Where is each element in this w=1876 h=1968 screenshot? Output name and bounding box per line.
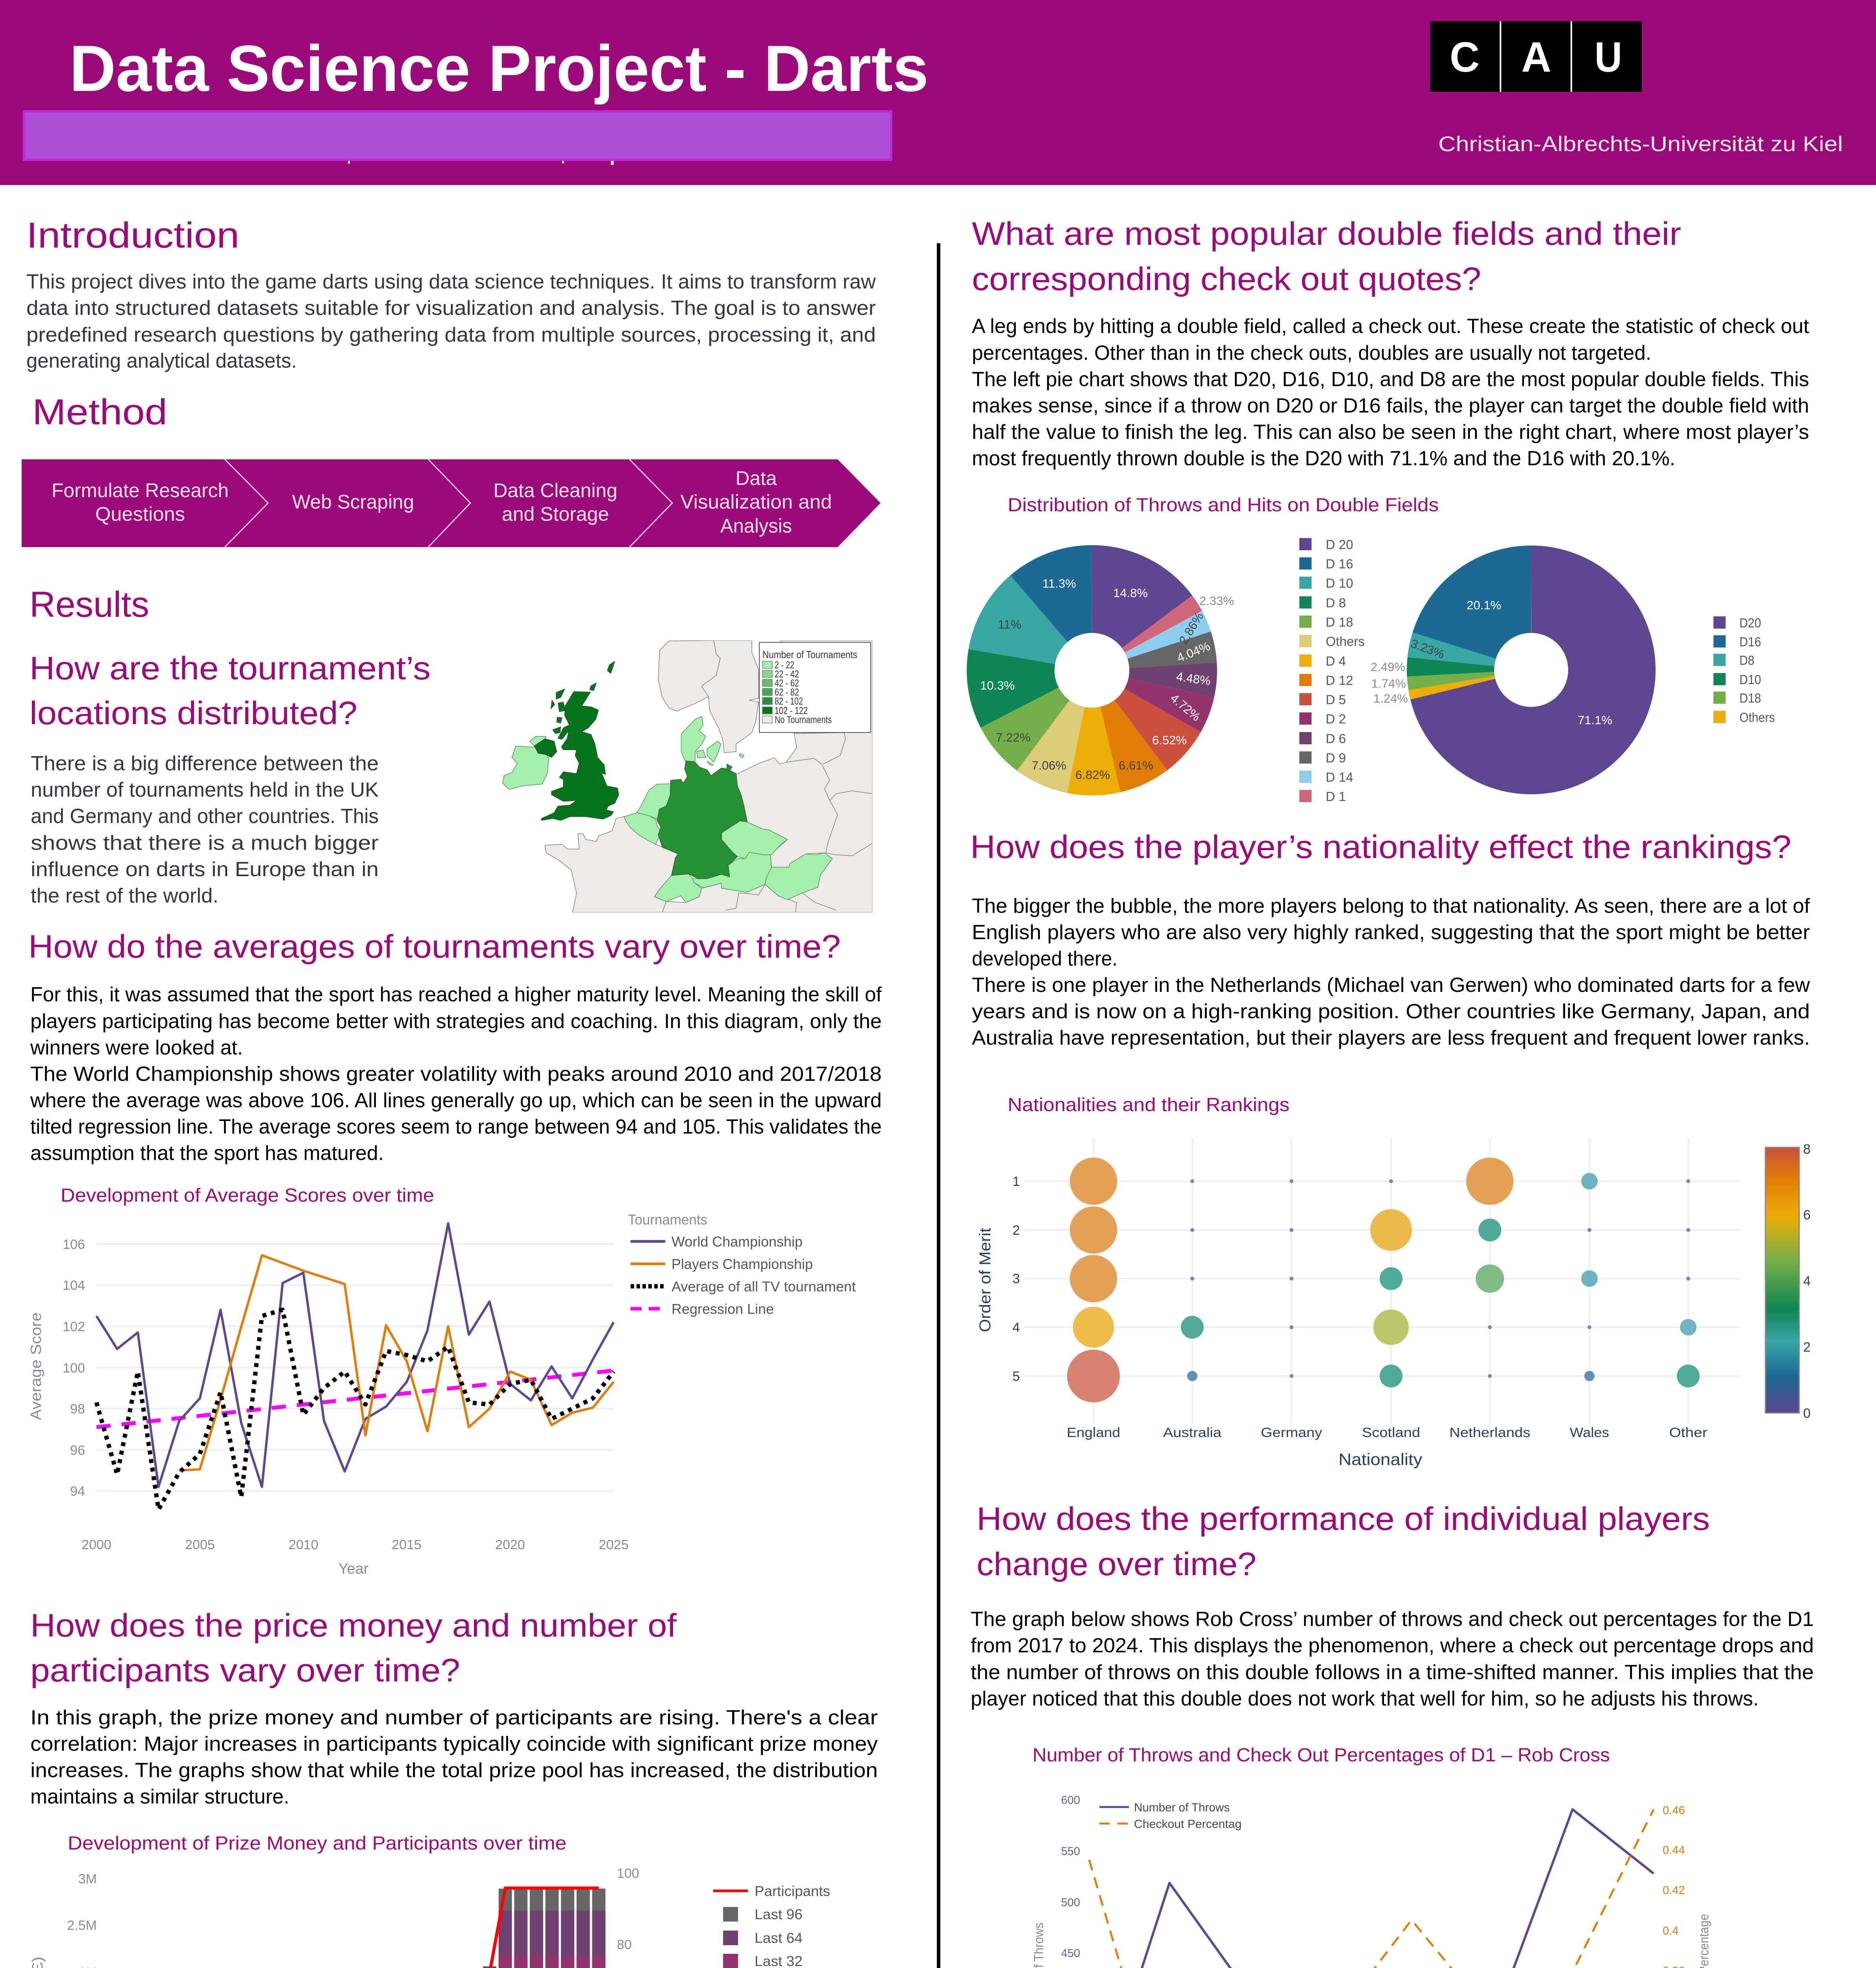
series: number of throws [1089, 1809, 1654, 1968]
line chart: average scores [28, 1212, 856, 1577]
legend: prize categories: Last 96 [755, 1906, 803, 1922]
icon: CAU logo: A [1521, 33, 1551, 81]
choropleth map of tournaments [503, 640, 872, 912]
step 1: Questions [95, 503, 185, 525]
line chart: average scores: 2015 [392, 1537, 422, 1552]
donut chart: throws on doubles: 2.86% [1176, 610, 1206, 647]
heading: tournament locations [30, 650, 431, 731]
line chart: average scores: 104 [63, 1278, 85, 1293]
donut chart: throws on doubles: 6.61% [1119, 758, 1153, 772]
text block: double fields: half the value to finish the leg. This can also be seen in the right chart, where most player’s [972, 421, 1809, 444]
line chart: average scores: 2025 [599, 1537, 629, 1552]
bubble chart: nationalities and rankings: Order of Merit [977, 1228, 994, 1332]
step 4 [680, 467, 832, 537]
text block: player performance [971, 1608, 1814, 1710]
text block: locations: the rest of the world. [31, 884, 218, 907]
map legend: 42 - 62 [775, 678, 799, 689]
legend: tournaments: Tournaments [628, 1212, 707, 1228]
color scale bar [1765, 1142, 1811, 1421]
legend: most thrown double: D18 [1739, 691, 1761, 705]
text block: locations: number of tournaments held in the UK [31, 779, 379, 801]
stacked bar chart: prize money and participants: 2.5M [67, 1918, 97, 1933]
heading: prize money: participants vary over time? [30, 1652, 460, 1689]
title: Data Science Project - Darts [69, 32, 929, 105]
line chart: rob cross: 0.44 [1663, 1844, 1685, 1857]
map legend: No Tournaments [775, 714, 832, 725]
series: world championship [96, 1223, 614, 1487]
stacked bar chart: prize money and participants: 3M [78, 1872, 97, 1887]
text block: double fields [972, 315, 1809, 470]
color scale bar: 2 [1803, 1340, 1811, 1355]
text block: player performance: from 2017 to 2024. This displays the phenomenon, where a check out percentage drops and [971, 1634, 1814, 1657]
text block: player performance: the number of throws on this double follows in a time-shifted manner. This implies that the [971, 1661, 1814, 1684]
text block: averages: winners were looked at. [30, 1036, 243, 1059]
icon: CAU logo [1430, 21, 1642, 92]
map legend: 82 - 102 [775, 696, 803, 707]
heading: double fields [972, 215, 1681, 297]
text block: nationality: There is one player in the Netherlands (Michael van Gerwen) who dominated darts for a few [972, 974, 1810, 997]
text block: double fields: makes sense, since if a throw on D20 or D16 fails, the player can target the double field with [972, 394, 1809, 417]
legend: most thrown double: D8 [1739, 653, 1754, 668]
header banner [0, 0, 1876, 185]
map legend: 22 - 42 [775, 669, 799, 680]
line chart: rob cross: 0.42 [1663, 1884, 1685, 1897]
legend: tournaments: Players Championship [672, 1256, 813, 1272]
line chart: average scores: 100 [63, 1361, 85, 1376]
text block: introduction: predefined research questions by gathering data from multiple sources, processing it, and [26, 324, 876, 346]
stacked bar chart: prize money and participants: 80 [617, 1937, 632, 1952]
text block: introduction: generating analytical datasets. [26, 350, 297, 372]
text block: player performance: player noticed that this double does not work that well for him, so he adjusts his throws. [971, 1687, 1759, 1710]
legend: throws on doubles: D 20 [1326, 537, 1353, 552]
legend: tournaments: Regression Line [672, 1301, 774, 1317]
legend: throws on doubles: Others [1326, 634, 1365, 649]
series: players championship [179, 1255, 614, 1470]
text block: introduction: This project dives into the game darts using data science techniques. It aims to transform raw [26, 270, 876, 293]
legend: tournaments [628, 1212, 856, 1317]
text block: introduction: data into structured datasets suitable for visualization and analysis. The goal is to answer [26, 297, 876, 320]
legend: most thrown double: D16 [1739, 634, 1761, 649]
donut chart: throws on doubles: 11.3% [1042, 577, 1076, 590]
line chart: average scores: 2010 [289, 1537, 318, 1552]
color scale bar: 8 [1803, 1142, 1811, 1157]
donut chart: most thrown double [1371, 589, 1612, 751]
color scale bar: 6 [1803, 1208, 1811, 1223]
legend: throws on doubles: D 9 [1326, 751, 1346, 765]
donut chart: throws on doubles: 10.3% [980, 679, 1015, 692]
legend: rob cross [1099, 1803, 1241, 1830]
step 3: and Storage [502, 503, 609, 525]
text block: locations: influence on darts in Europe than in [31, 858, 379, 881]
map legend [759, 642, 871, 732]
step 4: Analysis [720, 515, 792, 537]
redaction box over subtitle [24, 111, 891, 165]
bubble chart: nationalities and rankings: 2 [1012, 1223, 1020, 1238]
donut chart: throws on doubles [980, 577, 1234, 782]
text block: averages [30, 983, 882, 1165]
step 4: Visualization and [680, 491, 832, 513]
text block: prize money: In this graph, the prize money and number of participants are rising. There's a clear [30, 1706, 878, 1729]
text block: nationality: developed there. [972, 947, 1117, 970]
legend: prize categories [713, 1883, 856, 1968]
text block: averages: players participating has become better with strategies and coaching. In this diagram, only the [30, 1010, 882, 1033]
heading: nationality: How does the player’s nationality effect the rankings? [970, 829, 1791, 865]
text block: double fields: A leg ends by hitting a double field, called a check out. These create the statistic of check out [972, 315, 1809, 338]
donut chart: most thrown double: 2.49% [1371, 660, 1405, 674]
chart title: double fields: Distribution of Throws and Hits on Double Fields [1008, 495, 1439, 516]
donut chart: most thrown double: 3.23% [1409, 636, 1446, 661]
text block: double fields: most frequently thrown double is the D20 with 71.1% and the D16 with 20.1%. [972, 447, 1675, 470]
legend: prize categories: Participants [755, 1883, 830, 1899]
line chart: average scores: 2000 [81, 1537, 111, 1552]
heading: double fields: corresponding check out quotes? [972, 261, 1481, 297]
text block: double fields: The left pie chart shows that D20, D16, D10, and D8 are the most popular double fields. This [972, 368, 1809, 391]
line chart: rob cross: 500 [1061, 1896, 1080, 1909]
line chart: rob cross [1031, 1794, 1711, 1968]
legend: most thrown double: D10 [1739, 672, 1761, 687]
donut chart: throws on doubles: 4.48% [1175, 670, 1212, 688]
line chart: rob cross: 0.46 [1663, 1804, 1685, 1817]
color scale bar: 4 [1803, 1274, 1811, 1289]
donut chart: throws on doubles: 11% [998, 618, 1021, 631]
color scale bar: 0 [1803, 1406, 1811, 1421]
donut chart: throws on doubles: 4.04% [1175, 639, 1212, 665]
map legend: 102 - 122 [775, 705, 808, 716]
chart title: nationalities: Nationalities and their Rankings [1008, 1095, 1290, 1115]
bubble chart: nationalities and rankings: Netherlands [1449, 1425, 1530, 1440]
legend: throws on doubles: D 2 [1326, 712, 1346, 726]
text block: nationality: English players who are also very highly ranked, suggesting that the sport might be better [972, 921, 1810, 944]
legend: most thrown double: Others [1739, 710, 1775, 725]
line chart: rob cross: 450 [1061, 1947, 1080, 1960]
chart title: prize money: Development of Prize Money and Participants over time [68, 1833, 566, 1854]
heading: player performance: How does the performance of individual players [977, 1500, 1710, 1537]
legend: throws on doubles: D 8 [1326, 596, 1346, 610]
line chart: average scores: 96 [70, 1443, 85, 1458]
heading: averages: How do the averages of tournaments vary over time? [28, 928, 841, 965]
step 2: Web Scraping [292, 491, 414, 513]
heading: tournament locations: locations distributed? [30, 695, 357, 731]
step 3: Data Cleaning [494, 479, 617, 501]
legend: throws on doubles: D 6 [1326, 731, 1346, 746]
donut chart: throws on doubles: 6.52% [1152, 733, 1187, 747]
legend: throws on doubles: D 5 [1326, 692, 1346, 707]
heading: player performance [977, 1500, 1710, 1582]
legend: throws on doubles: D 14 [1326, 770, 1353, 784]
heading: double fields: What are most popular double fields and their [972, 215, 1681, 252]
text block: nationality: years and is now on a high-ranking position. Other countries like Germany, Japan, and [972, 1000, 1810, 1023]
text block: double fields: percentages. Other than in the check outs, doubles are usually not targeted. [972, 342, 1651, 364]
series: regression line [96, 1371, 614, 1427]
bubble chart: nationalities and rankings: Other [1669, 1425, 1708, 1440]
text block: locations: and Germany and other countries. This [31, 805, 379, 828]
stacked bar chart: prize money and participants: 100 [617, 1866, 639, 1881]
bubble chart: nationalities and rankings: Wales [1570, 1425, 1609, 1440]
donut chart: throws on doubles: 14.8% [1113, 586, 1148, 600]
step 3 [494, 479, 617, 525]
heading: prize money: How does the price money and number of [30, 1607, 677, 1644]
text block: averages: tilted regression line. The average scores seem to range between 94 and 105. This validates the [30, 1115, 882, 1138]
donut chart: most thrown double: 1.24% [1373, 692, 1408, 705]
legend: throws on doubles: D 4 [1326, 654, 1346, 668]
heading: prize money [30, 1607, 677, 1689]
heading: method: Method [32, 392, 167, 432]
line chart: average scores: 106 [63, 1237, 85, 1252]
legend: tournaments: Average of all TV tournament [672, 1278, 856, 1295]
legend: prize categories: Last 64 [755, 1930, 803, 1946]
line chart: average scores: 2005 [185, 1537, 215, 1552]
donut chart: most thrown double: 1.74% [1371, 677, 1406, 690]
heading: tournament locations: How are the tournament’s [30, 650, 431, 686]
line chart: average scores: 2020 [495, 1537, 525, 1552]
legend: most thrown double [1713, 616, 1775, 725]
university name: Christian-Albrechts-Universität zu Kiel [1438, 132, 1843, 156]
heading: introduction: Introduction [26, 215, 239, 255]
donut chart: throws on doubles: 4.72% [1168, 691, 1203, 724]
bubble chart: nationalities and rankings: 1 [1012, 1174, 1020, 1189]
text block: nationality: The bigger the bubble, the more players belong to that nationality. As seen, there are a lot of [972, 895, 1810, 917]
legend: throws on doubles: D 16 [1326, 557, 1353, 571]
text block: prize money: correlation: Major increases in participants typically coincide with significant prize money [30, 1733, 878, 1755]
process chevrons [22, 459, 881, 547]
bubble chart: nationalities and rankings: Nationality [1338, 1450, 1423, 1469]
line chart: rob cross: 600 [1061, 1794, 1080, 1807]
series: participants line [115, 1888, 599, 1968]
line chart: average scores: 102 [63, 1319, 85, 1334]
icon: CAU logo: C [1450, 33, 1480, 81]
legend: tournaments: World Championship [672, 1234, 803, 1250]
step 1: Formulate Research [52, 479, 229, 501]
donut chart: throws on doubles: 7.06% [1032, 758, 1066, 772]
line chart: average scores: 98 [70, 1402, 85, 1417]
line chart: average scores: Year [339, 1561, 369, 1577]
bubble chart: nationalities and rankings [977, 1138, 1811, 1469]
step 4: Data [735, 467, 777, 489]
line chart: rob cross: 550 [1061, 1845, 1080, 1858]
heading: results: Results [30, 584, 149, 625]
bubble chart: nationalities and rankings: 5 [1012, 1369, 1020, 1384]
map legend: 62 - 82 [775, 687, 799, 698]
donut chart: throws on doubles: 6.82% [1075, 768, 1110, 782]
heading: player performance: change over time? [977, 1546, 1256, 1582]
bubble chart: nationalities and rankings: Australia [1163, 1425, 1221, 1440]
bubble chart: nationalities and rankings: 3 [1012, 1271, 1020, 1286]
map legend: Number of Tournaments [762, 649, 857, 660]
icon: CAU logo: U [1595, 33, 1622, 81]
series: checkout percentage [1089, 1809, 1654, 1968]
legend: throws on doubles: D 10 [1326, 576, 1353, 590]
text block: nationality: Australia have representation, but their players are less frequent and frequent lower ranks. [972, 1027, 1810, 1049]
series: average of all tv tournaments [96, 1310, 614, 1509]
bubble chart: nationalities and rankings: Scotland [1362, 1425, 1420, 1440]
text block: averages: where the average was above 106. All lines generally go up, which can be seen in the upward [30, 1089, 882, 1112]
text block: introduction [26, 270, 876, 372]
chart title: rob cross: Number of Throws and Check Out Percentages of D1 – Rob Cross [1032, 1745, 1610, 1766]
legend: rob cross: Number of Throws [1134, 1801, 1230, 1814]
legend: throws on doubles [1299, 537, 1365, 804]
donut chart: most thrown double: 20.1% [1467, 598, 1501, 612]
text block: prize money [30, 1706, 878, 1808]
legend: rob cross: Checkout Percentage [1134, 1818, 1248, 1831]
map legend: 2 - 22 [775, 660, 794, 671]
text block: averages: assumption that the sport has matured. [30, 1142, 384, 1165]
line chart: rob cross: 0.4 [1663, 1925, 1678, 1937]
bubble chart: nationalities and rankings: Germany [1261, 1425, 1322, 1440]
text block: prize money: maintains a similar structure. [30, 1785, 289, 1808]
step 1 [52, 479, 229, 525]
bubble chart: nationalities and rankings: England [1067, 1425, 1120, 1440]
text block: prize money: increases. The graphs show that while the total prize pool has increased, the distribution [30, 1759, 878, 1782]
legend: throws on doubles: D 12 [1326, 673, 1353, 688]
text block: averages: The World Championship shows greater volatility with peaks around 2010 and 2017/2018 [30, 1063, 882, 1086]
stacked bar chart: prize money and participants [30, 1866, 856, 1968]
text block: locations [31, 752, 379, 907]
donut chart: most thrown double: 71.1% [1578, 713, 1612, 727]
bubble chart: nationalities and rankings: 4 [1012, 1320, 1020, 1335]
donut chart: throws on doubles: 2.33% [1199, 594, 1234, 608]
legend: throws on doubles: D 18 [1326, 615, 1353, 629]
chart title: average scores: Development of Average Scores over time [61, 1185, 434, 1206]
line chart: average scores: 94 [70, 1484, 85, 1499]
text block: locations: shows that there is a much bigger [31, 832, 379, 855]
line chart: average scores: Average Score [28, 1312, 44, 1420]
text block: player performance: The graph below shows Rob Cross’ number of throws and check out percentages for the D1 [971, 1608, 1814, 1631]
donut chart: throws on doubles: 7.22% [996, 731, 1031, 744]
text block: nationality [972, 895, 1810, 1049]
text block: locations: There is a big difference between the [31, 752, 379, 775]
text block: averages: For this, it was assumed that the sport has reached a higher maturity level. Meaning the skill of [30, 983, 882, 1006]
legend: most thrown double: D20 [1739, 616, 1761, 630]
legend: throws on doubles: D 1 [1326, 789, 1346, 804]
